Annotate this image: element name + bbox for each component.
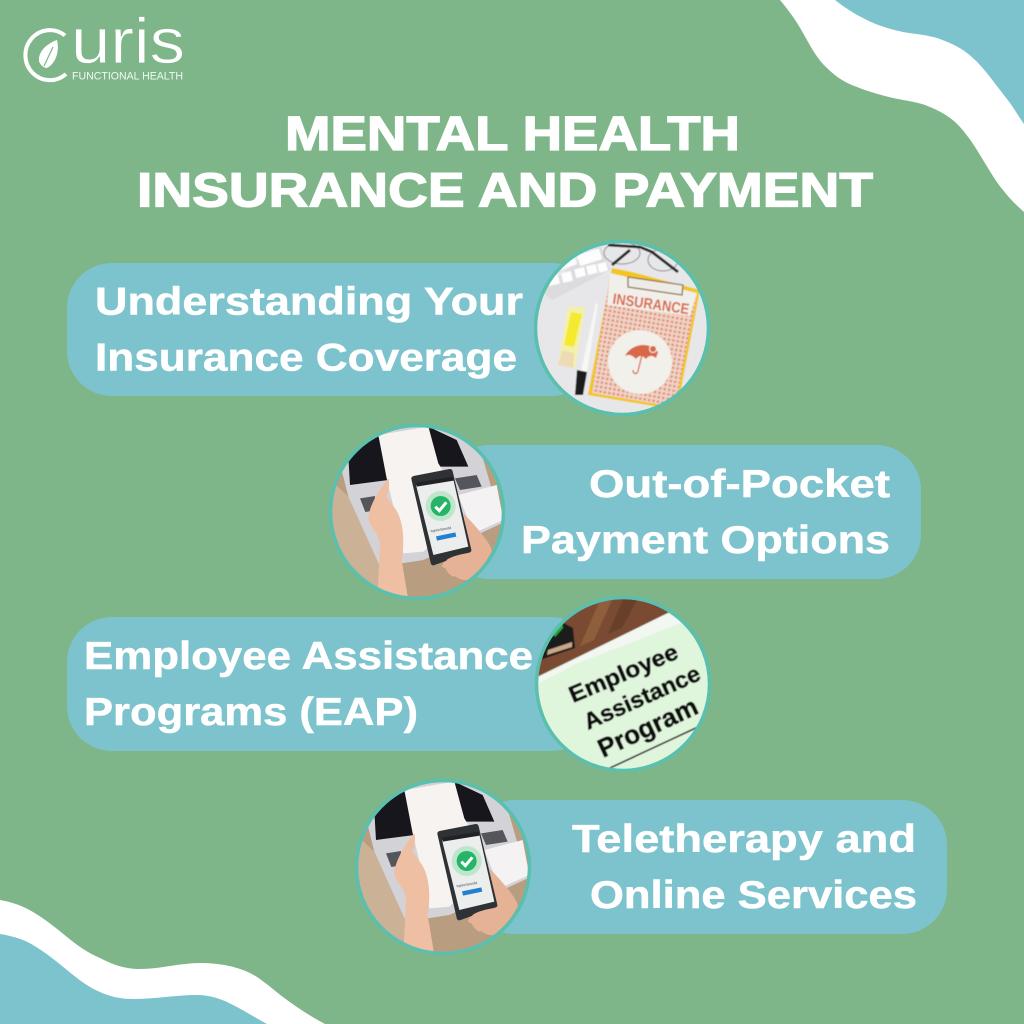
glasses bbox=[604, 242, 678, 272]
panel: understanding your insurance coverage bbox=[67, 235, 715, 420]
decoration: top right wave bbox=[780, 0, 1024, 212]
title bbox=[137, 107, 873, 218]
label 4 bbox=[572, 818, 917, 917]
title: MENTAL HEALTH bbox=[285, 107, 740, 161]
label 2: Payment Options bbox=[521, 519, 890, 562]
pill 3 bbox=[67, 617, 597, 751]
photo ring 4 bbox=[356, 780, 530, 954]
black object bbox=[542, 623, 576, 660]
panel: employee assistance programs bbox=[67, 590, 720, 780]
title: INSURANCE AND PAYMENT bbox=[137, 164, 873, 218]
pill 1 bbox=[67, 263, 597, 396]
pen bbox=[581, 303, 598, 372]
highlighter bbox=[558, 307, 585, 368]
label 3: Employee Assistance bbox=[84, 635, 533, 678]
label 1: Insurance Coverage bbox=[95, 336, 517, 380]
logo mark: C with leaf bbox=[25, 30, 66, 80]
photo ring 1 bbox=[536, 242, 708, 414]
photo ring 2 bbox=[330, 426, 504, 598]
panel: out-of-pocket payment options bbox=[320, 420, 921, 605]
label 3 bbox=[84, 635, 533, 734]
document text bbox=[568, 647, 701, 758]
wood surface bbox=[538, 599, 670, 677]
clipboard bbox=[588, 268, 700, 410]
photo ring 3 bbox=[536, 598, 710, 770]
logo tagline: FUNCTIONAL HEALTH bbox=[72, 70, 183, 82]
signature line bbox=[610, 727, 698, 768]
pill 2 bbox=[445, 445, 921, 579]
photo: insurance clipboard bbox=[537, 243, 707, 413]
document text: Assistance bbox=[579, 660, 704, 735]
document text: Employee bbox=[565, 638, 682, 708]
photo: phone payment confirmation bbox=[332, 427, 502, 597]
document text: Program bbox=[593, 691, 703, 763]
clipboard clip bbox=[628, 277, 683, 295]
photo: phone confirmation for online services: Payment Successful bbox=[456, 881, 478, 888]
photo: employee assistance program document bbox=[538, 599, 708, 769]
photo: phone payment confirmation: Payment Successful bbox=[430, 526, 452, 533]
label 1: Understanding Your bbox=[95, 280, 523, 324]
clipboard label: INSURANCE bbox=[612, 291, 690, 318]
logo: Curis Functional Health bbox=[25, 5, 185, 82]
label 2: Out-of-Pocket bbox=[589, 463, 890, 506]
photo: phone confirmation for online services bbox=[358, 782, 528, 952]
umbrella on clipboard bbox=[608, 330, 672, 394]
label 4: Teletherapy and bbox=[572, 818, 916, 861]
label 4: Online Services bbox=[590, 874, 917, 917]
panel: teletherapy and online services bbox=[346, 775, 947, 960]
pill 4 bbox=[470, 800, 947, 934]
label 1 bbox=[95, 280, 523, 380]
logo wordmark: uris bbox=[71, 5, 185, 77]
paper edge bbox=[537, 613, 682, 684]
decoration: bottom left wave bbox=[0, 900, 325, 1024]
keyboard bbox=[545, 246, 609, 300]
label 2 bbox=[521, 463, 890, 562]
label 3: Programs (EAP) bbox=[84, 691, 418, 734]
